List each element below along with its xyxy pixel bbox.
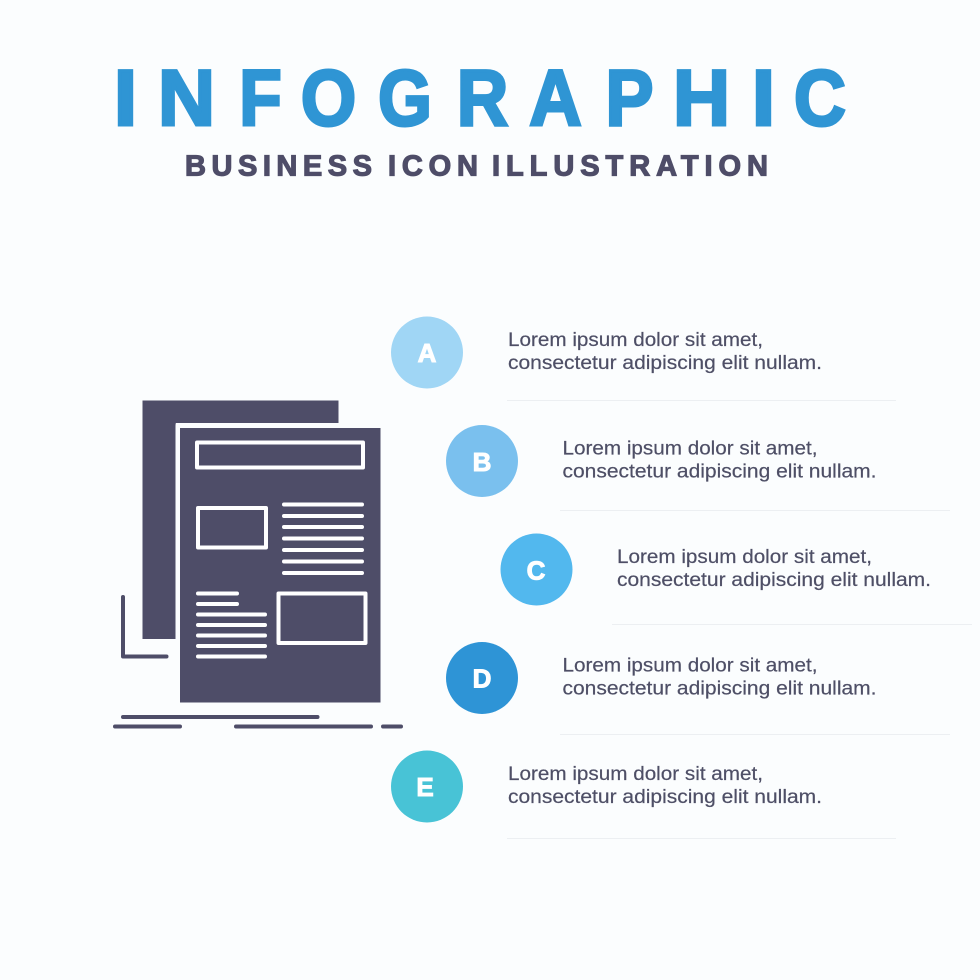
text D: consectetur adipiscing elit nullam. [562, 678, 876, 700]
subtitle: BUSINESS [185, 150, 372, 182]
item C [500, 534, 972, 624]
icon: newspaper documents [115, 400, 401, 726]
letter C: C [527, 556, 546, 586]
text C: Lorem ipsum dolor sit amet, [617, 547, 872, 568]
title: I [752, 55, 775, 142]
title [114, 53, 846, 143]
letter E: E [416, 772, 434, 802]
page content [197, 442, 366, 656]
circle A [391, 316, 463, 388]
subtitle: ILLUSTRATION [492, 150, 768, 182]
item A [391, 316, 896, 400]
text C: consectetur adipiscing elit nullam. [617, 570, 931, 591]
text A: Lorem ipsum dolor sit amet, [508, 330, 763, 351]
text D: Lorem ipsum dolor sit amet, [562, 656, 818, 676]
text B [562, 438, 876, 482]
text E: consectetur adipiscing elit nullam. [508, 787, 822, 808]
corner bracket and ground lines [115, 597, 401, 726]
title: P [606, 55, 653, 143]
text B: consectetur adipiscing elit nullam. [562, 462, 876, 482]
text D [562, 656, 876, 700]
text E [508, 764, 822, 808]
circle B [446, 425, 518, 497]
title: A [529, 54, 582, 143]
title: F [239, 54, 282, 142]
title: R [457, 54, 508, 142]
text A: consectetur adipiscing elit nullam. [508, 353, 822, 374]
front page [180, 428, 380, 702]
letter B: B [473, 447, 491, 477]
text A [508, 330, 822, 374]
item B [446, 425, 950, 510]
title: H [673, 53, 730, 142]
subtitle: ICON [388, 150, 478, 182]
title: N [158, 53, 215, 142]
circle C [500, 534, 572, 606]
letter D: D [473, 664, 491, 694]
title: O [301, 54, 356, 142]
title: G [378, 54, 432, 142]
text E: Lorem ipsum dolor sit amet, [508, 764, 763, 785]
item D [446, 642, 950, 734]
text C [617, 547, 931, 591]
item E [391, 750, 896, 838]
subtitle [185, 150, 768, 182]
circle D [446, 642, 518, 714]
circle E [391, 750, 463, 822]
title: C [794, 55, 846, 143]
text B: Lorem ipsum dolor sit amet, [562, 438, 818, 460]
letter A: A [418, 338, 437, 368]
title: I [114, 55, 137, 142]
back page [142, 400, 338, 639]
